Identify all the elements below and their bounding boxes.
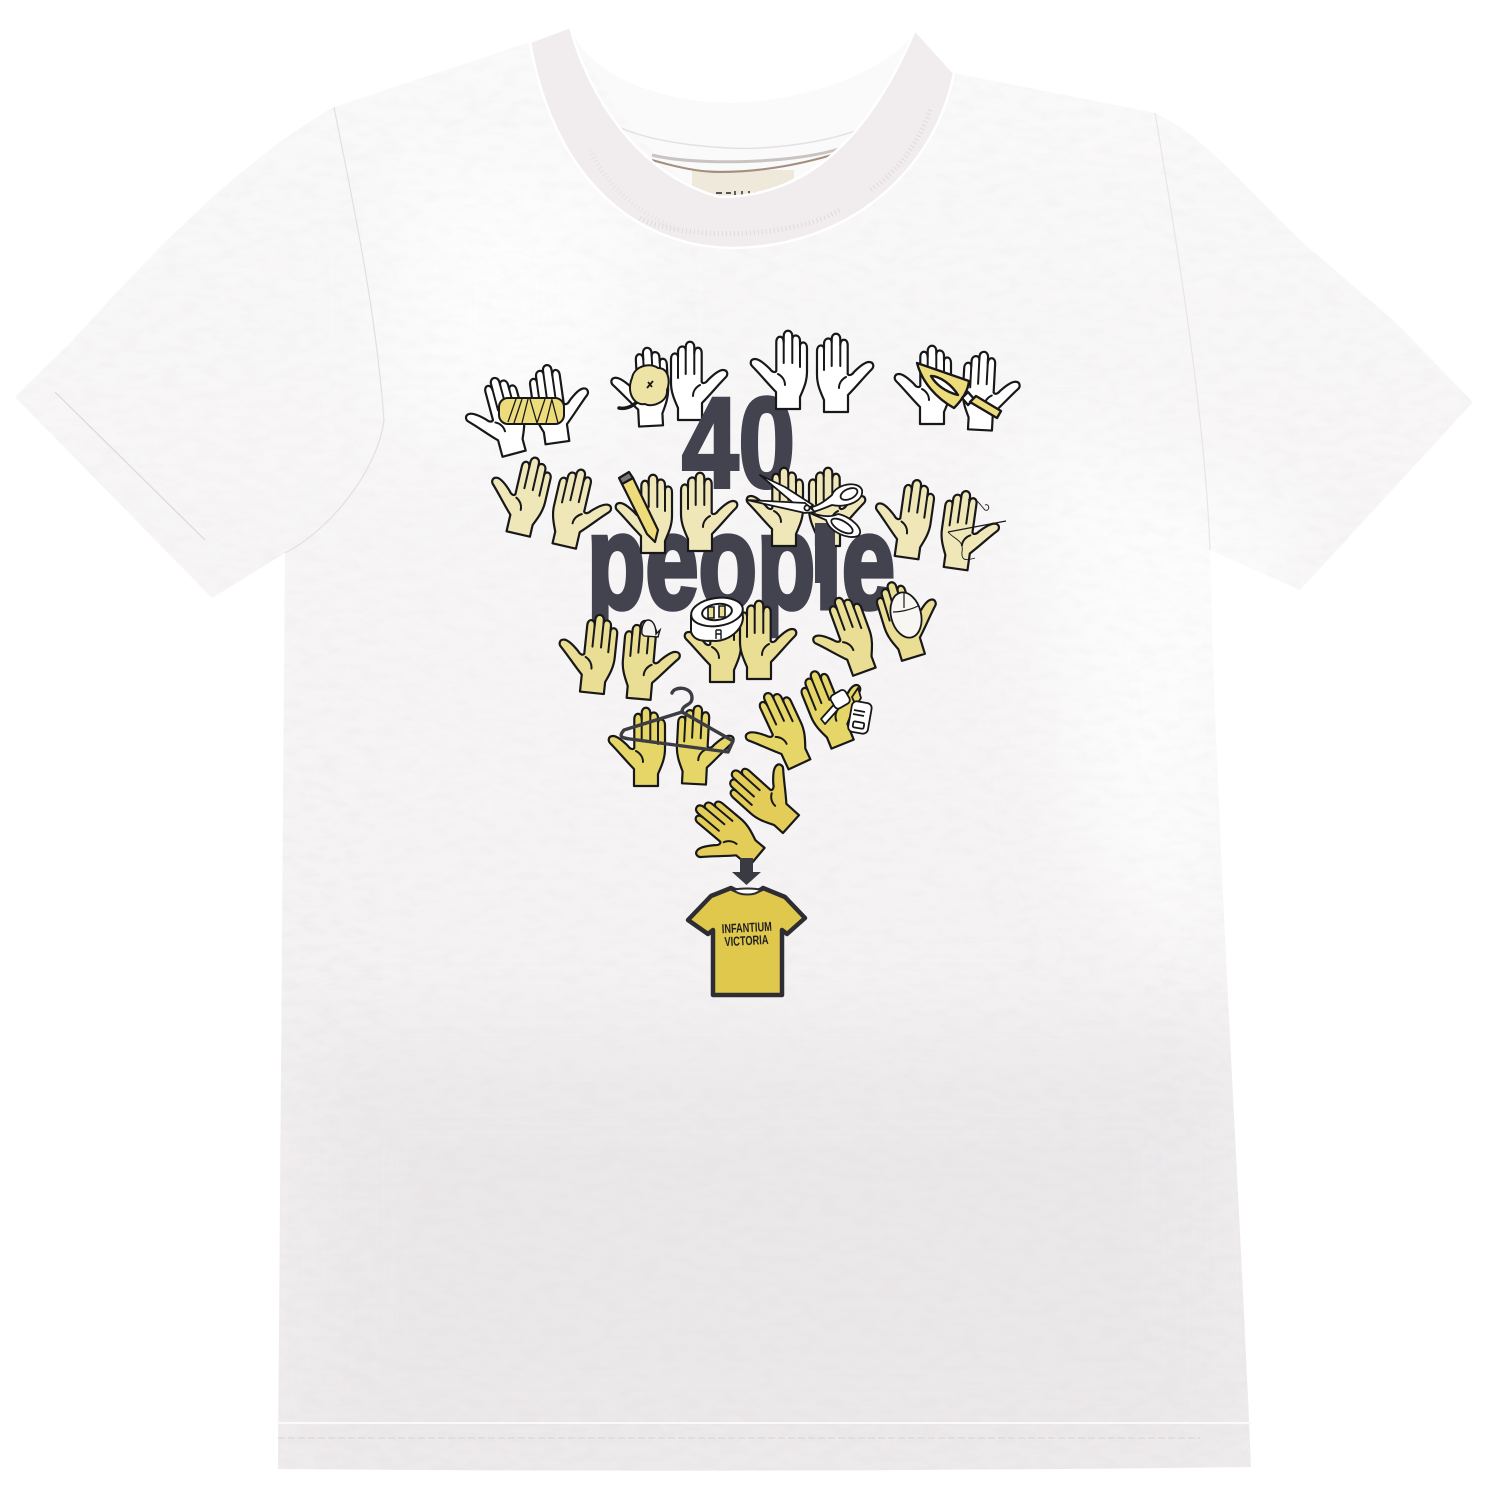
icon: pencil [619, 472, 658, 542]
arrow [732, 858, 761, 885]
icon: cotton boll [619, 365, 669, 408]
shirt slogan [721, 919, 773, 949]
garment label [652, 148, 842, 197]
icon: tape roll [689, 595, 745, 641]
icon: computer mouse [886, 589, 926, 641]
row 1: white hands with raw materials [458, 331, 1021, 463]
heading: 40 people: people [587, 488, 895, 637]
sleeve and hem stitching [55, 107, 1251, 1438]
shirt slogan: VICTORIA [724, 932, 769, 949]
heading: 40 people: 40 [682, 372, 795, 515]
row 5: saturated hands [673, 744, 816, 886]
finished shirt icon [688, 888, 805, 995]
icon: coat hanger [621, 688, 733, 752]
icon: needle and thread [948, 499, 1006, 560]
inside back neck [570, 27, 915, 197]
hand behind the number [671, 342, 727, 420]
row 2: pale hands with design tools [482, 449, 1006, 583]
letter l over the wrist [815, 523, 835, 583]
fabric shading [316, 753, 1230, 1440]
ribbed collar [530, 27, 954, 248]
row 4: yellow hands [609, 658, 877, 786]
print artwork [458, 331, 1021, 995]
shirt slogan: INFANTIUM [721, 919, 772, 936]
icon: car keys [821, 688, 872, 734]
icon: thimble [642, 620, 660, 637]
row 3: mid yellow hands with production tools [555, 572, 949, 702]
heading: 40 people [587, 372, 895, 637]
icon: scissors [747, 475, 862, 537]
icon: yarn [499, 398, 564, 424]
icon: trowel [917, 363, 1001, 418]
